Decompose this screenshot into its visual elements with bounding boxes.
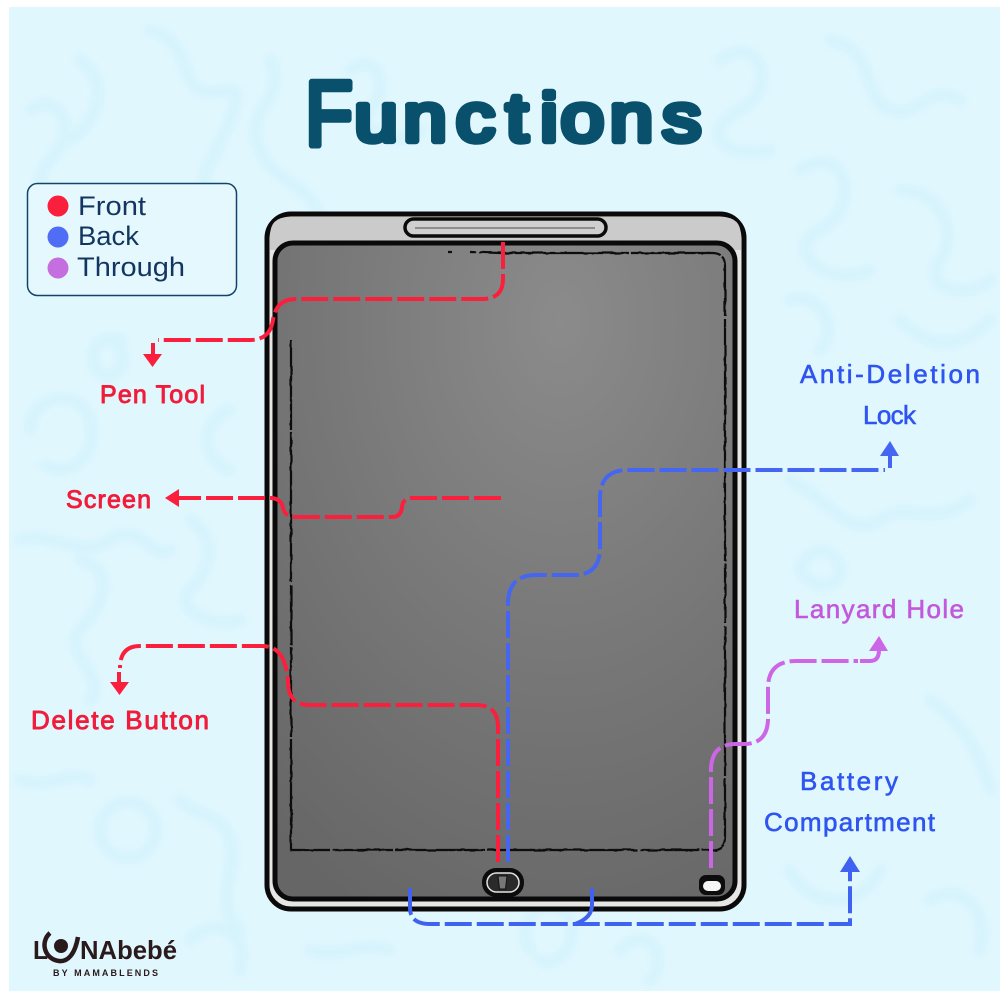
pen slot: [405, 219, 606, 236]
title: [305, 63, 701, 165]
legend item: front: Front: [78, 191, 147, 221]
label: pen tool: Pen Tool: [100, 381, 205, 409]
label: battery compartment: [764, 766, 936, 837]
label: battery compartment: Battery: [800, 766, 898, 796]
label: anti-deletion lock: Lock: [863, 400, 917, 430]
legend: [28, 184, 236, 296]
tablet screen: [275, 243, 735, 899]
tablet body: [267, 214, 744, 909]
connector: lanyard hole: [711, 636, 888, 868]
label: lanyard hole: Lanyard Hole: [794, 594, 964, 624]
connector: delete button: [110, 646, 498, 862]
legend item: back: Back: [78, 221, 140, 251]
logo: [33, 933, 177, 978]
connector: anti-deletion lock: [508, 441, 899, 862]
tablet device: [267, 214, 744, 909]
title: F: [305, 63, 353, 165]
connector: battery compartment: [410, 856, 860, 924]
label: screen: Screen: [66, 486, 151, 514]
connector: pen tool: [143, 242, 503, 367]
label: anti-deletion lock: Anti-Deletion: [800, 359, 980, 389]
label: battery compartment: Compartment: [764, 807, 936, 837]
logo icon: [45, 933, 78, 961]
legend item: back: [48, 221, 140, 251]
logo: NAbebé: [80, 935, 177, 965]
lanyard hole: [699, 875, 725, 895]
label: delete button: Delete Button: [31, 705, 209, 735]
label: anti-deletion lock: [800, 359, 980, 430]
logo: BY MAMABLENDS: [53, 968, 158, 978]
logo: L: [33, 935, 48, 965]
title: unctions: [355, 80, 701, 156]
legend item: front: [48, 191, 147, 221]
inner screen outline: [291, 252, 725, 850]
legend item: through: Through: [77, 252, 185, 282]
connector: screen: [165, 489, 501, 517]
delete button: [482, 868, 524, 897]
